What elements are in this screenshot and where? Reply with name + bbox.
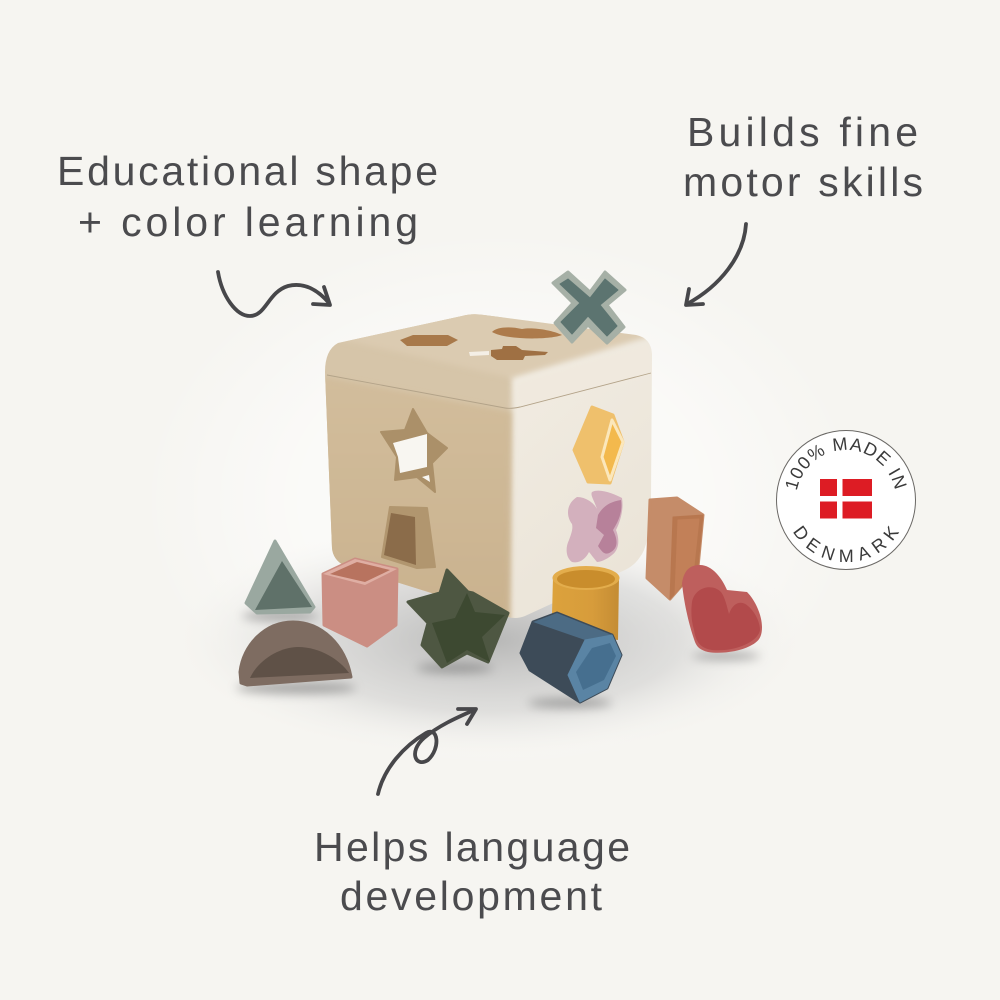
piece: rose cube (323, 559, 397, 646)
arrow: to cube from educational text (218, 272, 330, 316)
trapezoid opening (384, 513, 416, 565)
piece: dark green star (408, 570, 508, 667)
icon: Danish flag (820, 479, 872, 518)
badge: 100% made in Denmark (776, 430, 916, 570)
star small window (422, 475, 430, 482)
badge: 100% made in Denmark: 100% MADE IN (786, 437, 907, 490)
piece: red heart (682, 565, 762, 653)
lid seam (327, 373, 651, 408)
heading: builds fine motor skills: motor skills (683, 159, 923, 205)
hole: cross (491, 346, 548, 360)
piece: taupe half circle (240, 622, 351, 685)
piece: mustard cylinder (552, 566, 620, 640)
hole: star front (381, 409, 447, 492)
heading: educational shape and color learning: Educational shape (57, 148, 438, 194)
heading: helps language development (314, 824, 630, 919)
star window (393, 434, 427, 473)
floor glow (140, 230, 860, 770)
piece: sage triangle (246, 541, 314, 613)
arrow: to cube from fine motor text (686, 224, 746, 305)
badge: 100% made in Denmark: DENMARK (793, 525, 900, 562)
piece: terracotta rectangle (647, 498, 703, 599)
cube shape sorter (325, 314, 652, 618)
piece: navy hexagon (521, 613, 621, 702)
heading: helps language development: development (340, 873, 603, 919)
trapezoid piece front (382, 507, 435, 568)
hole: hexagon (400, 335, 458, 346)
hole: heart (492, 327, 562, 338)
hole highlight: cross (469, 351, 489, 356)
heading: builds fine motor skills: Builds fine (687, 109, 918, 155)
contact shadows under pieces (236, 611, 760, 708)
heading: helps language development: Helps language (314, 824, 630, 870)
piece: pink clover (567, 491, 623, 562)
heading: educational shape and color learning: + color learning (78, 199, 418, 245)
floor shadow (170, 520, 810, 760)
arrow: to toys from language text (378, 709, 476, 794)
piece: sage cross on lid (553, 272, 625, 343)
piece: yellow diamond (574, 407, 623, 483)
cube body and faces (325, 314, 652, 618)
heading: educational shape and color learning (57, 148, 438, 245)
heading: builds fine motor skills (683, 109, 923, 205)
